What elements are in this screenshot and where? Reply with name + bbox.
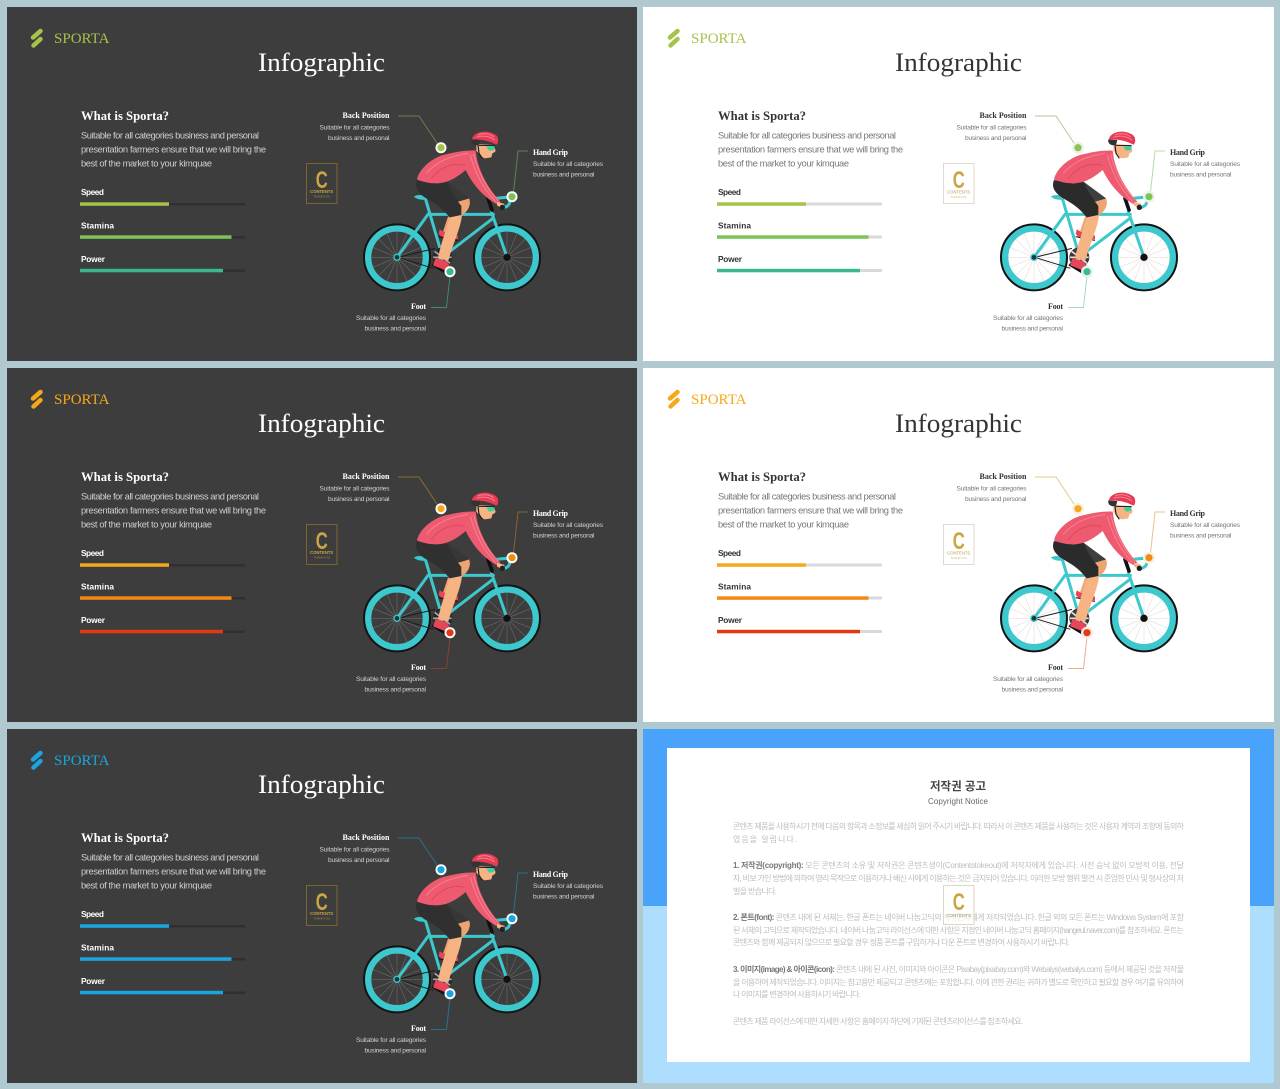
callout: foot: business and personal: [364, 1048, 427, 1054]
callout: hand grip: [1143, 509, 1241, 564]
bar chart: stats: Power: [81, 976, 106, 986]
text block: intro: [81, 469, 266, 530]
callout: hand grip: business and personal: [1170, 172, 1232, 178]
text block: intro: [81, 108, 266, 168]
callout: back position: Back Position: [342, 111, 390, 120]
text block: font clause: 콘텐츠와 함께 제공되지 않으므로 필요할 경우 정품 폰트를 구입하거나 다운 폰트로 변경하여 사용하시기 바랍니다.: [733, 937, 1070, 947]
text block: intro: What is Sporta?: [81, 108, 169, 123]
bar chart: stats: [80, 548, 245, 633]
text block: copyright clause: 1. 저작권(copyright): 모든 콘텐츠의 소유 및 저작권은 콘텐츠생이(Contentstokeout)에 저작자에게 있습니다. 사전 승낙 없이 모방적 이용, 전달: [733, 860, 1185, 870]
bar chart: stats: Stamina: [718, 220, 751, 230]
panel: dark blue slide: [7, 729, 637, 1083]
callout: foot: [356, 266, 456, 332]
callout: back position: business and personal: [328, 135, 390, 142]
callout: hand grip: Hand Grip: [533, 148, 569, 157]
text block: intro: best of the market to your kimquae: [81, 520, 212, 530]
callout: hand grip: Hand Grip: [1170, 509, 1206, 518]
heading: copyright notice: 저작권 공고: [930, 778, 986, 794]
illustration: cyclist: [1001, 132, 1177, 290]
title: Infographic: [895, 47, 1022, 77]
text block: intro: [718, 469, 903, 530]
text block: intro: [81, 830, 266, 890]
bar chart: stats: Power: [81, 254, 106, 264]
illustration: cyclist: [364, 132, 540, 290]
text block: intro notice: 콘텐츠 제품을 사용하시기 전에 다음의 항목과 소정보를 세심히 읽어 주시기 바랍니다. 따라서 이 콘텐츠 제품을 사용하는 것은 사용자 계약과 조항에 동의하: [733, 821, 1185, 831]
text block: intro: Suitable for all categories business and personal: [718, 492, 896, 502]
callout: foot: Foot: [1048, 663, 1063, 672]
callout: foot: Suitable for all categories: [993, 676, 1064, 683]
callout: hand grip: Hand Grip: [533, 509, 569, 518]
callout: foot: Foot: [1048, 302, 1063, 311]
callout: back position: Suitable for all categories: [956, 124, 1027, 132]
text block: image clause: 나 이미지를 변경하여 사용하시기 바랍니다.: [733, 989, 861, 999]
bar chart: stats: Speed: [718, 187, 741, 197]
watermark: [944, 164, 974, 204]
text block: intro: [718, 108, 903, 168]
callout: back position: Suitable for all categories: [320, 124, 390, 132]
callout: hand grip: [1143, 148, 1241, 203]
callout: back position: Back Position: [980, 111, 1027, 120]
callout: back position: Back Position: [342, 472, 390, 481]
callout: back position: [320, 833, 446, 875]
callout: hand grip: Hand Grip: [533, 870, 569, 879]
callout: hand grip: Suitable for all categories: [533, 161, 604, 168]
text block: intro: Suitable for all categories business and personal: [81, 492, 259, 502]
heading: copyright notice: Copyright Notice: [928, 797, 989, 806]
text block: intro: Suitable for all categories business and personal: [718, 130, 896, 140]
callout: back position: business and personal: [328, 857, 390, 864]
panel: copyright notice: [643, 729, 1274, 1083]
bar chart: stats: [80, 909, 245, 994]
title: Infographic: [258, 408, 385, 438]
bar chart: stats: Speed: [718, 548, 741, 558]
callout: foot: Foot: [411, 663, 426, 672]
callout: back position: Suitable for all categories: [956, 486, 1027, 492]
text block: intro: best of the market to your kimquae: [718, 158, 849, 168]
bar chart: stats: Speed: [81, 548, 104, 558]
callout: foot: business and personal: [1002, 326, 1064, 332]
panel: dark green slide: [7, 7, 637, 361]
text block: font clause: 2. 폰트(font): 콘텐츠 내에 된 서체는, 한글 폰트는 네이버 나눔고딕의 저작권자에게 저작되었습니다. 한글 외의 모든 폰트는 Windows System에 포함: [733, 912, 1185, 922]
text block: intro: What is Sporta?: [718, 108, 806, 123]
text block: copyright clause: 자, 비보 가인 방법에 의하여 영리 목적으로 이용하거나 배신 사에게 이용하는 것은 금지되어 있습니다. 이러한 모방 행위 발견 시 준엄한 민사 및 형사상의 처: [733, 873, 1184, 883]
text block: intro notice: 였음을 알립니다.: [733, 834, 797, 844]
callout: back position: [956, 111, 1084, 154]
text block: intro: best of the market to your kimquae: [81, 158, 212, 168]
callout: hand grip: business and personal: [533, 172, 595, 178]
callout: foot: business and personal: [1002, 686, 1064, 694]
callout: back position: business and personal: [328, 496, 390, 503]
logo: SPORTA: [691, 392, 747, 408]
text block: intro: What is Sporta?: [81, 469, 169, 484]
bar chart: stats: [717, 548, 882, 633]
text block: intro: best of the market to your kimquae: [718, 520, 849, 530]
text block: intro notice: [733, 821, 1185, 844]
logo: SPORTA: [54, 392, 110, 408]
watermark: C: [953, 889, 965, 916]
title: Infographic: [895, 408, 1022, 438]
watermark: [944, 524, 974, 564]
callout: hand grip: [506, 148, 604, 202]
watermark: [306, 886, 337, 926]
bar chart: stats: Speed: [81, 909, 104, 919]
text block: font clause: [733, 912, 1185, 947]
callout: back position: Suitable for all categories: [320, 486, 390, 492]
text block: intro: presentation farmers ensure that we will bring the: [718, 144, 903, 154]
callout: back position: Back Position: [980, 472, 1027, 481]
text block: intro: Suitable for all categories business and personal: [81, 852, 259, 862]
callout: hand grip: business and personal: [533, 532, 595, 540]
watermark: [306, 164, 337, 204]
bar chart: stats: Speed: [81, 187, 104, 197]
watermark: [306, 524, 337, 564]
text block: image clause: 3. 이미지(image) & 아이콘(icon): 콘텐츠 내에 된 사진, 이미지와 아이콘은 Pixabay(pixabay.com)와 Webalys(webalys.com) 등에서 제공된 것을 저작물: [733, 964, 1184, 974]
callout: foot: Suitable for all categories: [993, 315, 1064, 322]
text block: intro: presentation farmers ensure that we will bring the: [81, 506, 266, 516]
text block: intro: What is Sporta?: [718, 469, 806, 484]
callout: foot: [993, 627, 1093, 694]
bar chart: stats: Stamina: [81, 582, 114, 592]
callout: foot: [356, 988, 456, 1054]
watermark: CONTENTS: [946, 913, 971, 918]
callout: foot: Suitable for all categories: [356, 1037, 427, 1044]
bar chart: stats: [717, 187, 882, 272]
callout: hand grip: Hand Grip: [1170, 148, 1206, 157]
bar chart: stats: Stamina: [81, 220, 114, 230]
heading: copyright notice: [928, 778, 989, 806]
watermark: [944, 886, 974, 924]
callout: hand grip: Suitable for all categories: [533, 883, 604, 890]
text block: intro: What is Sporta?: [81, 830, 169, 845]
logo: SPORTA: [691, 31, 747, 47]
text block: intro: presentation farmers ensure that we will bring the: [81, 144, 266, 154]
callout: foot: Suitable for all categories: [356, 315, 427, 322]
bar chart: stats: Stamina: [718, 582, 751, 592]
callout: back position: business and personal: [965, 135, 1027, 142]
callout: back position: [320, 472, 446, 514]
text block: image clause: 을 이용하여 제작되었습니다. 이미지는 참고용만 제공되고 콘텐츠에는 포함합니다. 이에 관한 권리는 귀하가 별도로 확인하고 필요할 경우 여기를 유의하여: [733, 977, 1184, 987]
callout: foot: [993, 266, 1093, 332]
logo: SPORTA: [54, 753, 110, 769]
callout: back position: Back Position: [342, 833, 390, 842]
callout: foot: business and personal: [364, 326, 427, 332]
callout: back position: [956, 472, 1084, 515]
illustration: cyclist: [364, 493, 540, 651]
bar chart: stats: Power: [718, 254, 743, 264]
callout: foot: [356, 627, 456, 694]
title: Infographic: [258, 47, 385, 77]
text block: image clause: [733, 964, 1184, 999]
text block: intro: Suitable for all categories business and personal: [81, 130, 259, 140]
panel: light orange slide: [643, 368, 1274, 722]
callout: hand grip: Suitable for all categories: [1170, 522, 1241, 529]
logo: SPORTA: [54, 31, 110, 47]
text block: intro: best of the market to your kimquae: [81, 880, 212, 890]
panel: dark orange slide: [7, 368, 637, 722]
callout: hand grip: Suitable for all categories: [533, 522, 604, 529]
callout: hand grip: Suitable for all categories: [1170, 161, 1241, 168]
callout: hand grip: [506, 870, 604, 924]
callout: foot: Suitable for all categories: [356, 676, 427, 683]
callout: hand grip: business and personal: [1170, 532, 1232, 540]
text block: intro: presentation farmers ensure that we will bring the: [81, 866, 266, 876]
callout: foot: business and personal: [364, 686, 427, 694]
callout: hand grip: [506, 509, 604, 563]
callout: back position: Suitable for all categories: [320, 846, 390, 854]
bar chart: stats: Power: [81, 615, 106, 625]
text block: intro: presentation farmers ensure that we will bring the: [718, 506, 903, 516]
bar chart: stats: Power: [718, 615, 743, 625]
bar chart: stats: [80, 187, 245, 272]
text block: font clause: 된 서체의 고딕으로 제작되었습니다. 네이버 나눔고딕 라이선스에 대한 사항은 지정인 네이버 나눔고딕 홈페이지(hangeul.naver.com)를 참조하세요. 폰트는: [733, 925, 1184, 935]
callout: foot: Foot: [411, 302, 426, 311]
callout: foot: Foot: [411, 1024, 426, 1033]
text block: copyright clause: 벌을 받습니다.: [733, 886, 777, 896]
callout: back position: [320, 111, 446, 153]
text block: copyright clause: [733, 860, 1185, 896]
callout: back position: business and personal: [965, 496, 1027, 503]
bar chart: stats: Stamina: [81, 942, 114, 952]
text block: closing note: 콘텐츠 제품 라이선스에 대한 자세한 사항은 홈페이지 하단에 기재된 콘텐츠라이선스를 참조하세요.: [733, 1016, 1023, 1026]
panel: light green slide: [643, 7, 1274, 361]
illustration: cyclist: [1001, 493, 1177, 651]
callout: hand grip: business and personal: [533, 894, 595, 900]
title: Infographic: [258, 769, 385, 799]
illustration: cyclist: [364, 854, 540, 1012]
